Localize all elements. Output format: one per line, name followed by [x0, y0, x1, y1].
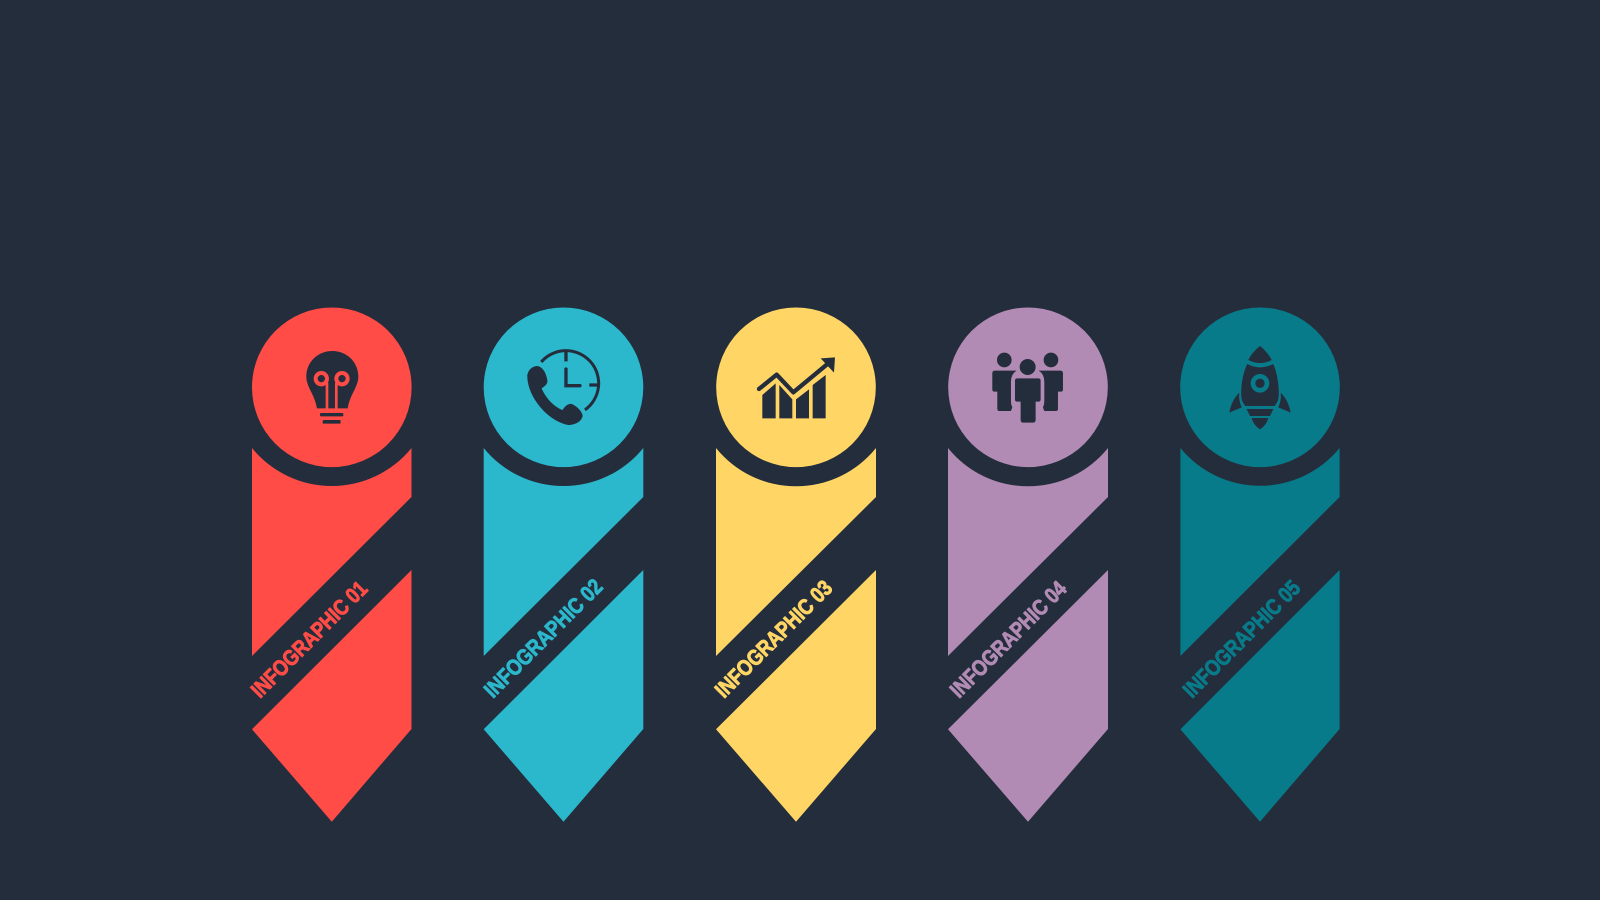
upper ribbon 01 [252, 448, 412, 656]
label 02: INFOGRAPHIC 02 [479, 574, 608, 703]
lower ribbon 04 [948, 570, 1108, 822]
icon: rising bar chart [759, 357, 835, 418]
panel: infographic 04 [945, 308, 1108, 822]
circle badge 02 [484, 308, 643, 467]
lower ribbon 05 [1180, 570, 1340, 822]
lower ribbon 02 [484, 570, 643, 822]
panel: infographic 03 [710, 308, 876, 822]
label 05: INFOGRAPHIC 05 [1178, 575, 1305, 703]
lower ribbon 03 [716, 570, 876, 822]
icon: phone and clock [527, 351, 599, 425]
upper ribbon 04 [948, 448, 1108, 656]
label 01: INFOGRAPHIC 01 [246, 576, 372, 703]
circle badge 01 [252, 308, 412, 467]
circle badge 03 [716, 308, 876, 467]
panel: infographic 05 [1178, 308, 1340, 822]
label 03: INFOGRAPHIC 03 [710, 575, 837, 703]
panel: infographic 01 [246, 308, 412, 822]
circle badge 04 [948, 308, 1108, 467]
label 04: INFOGRAPHIC 04 [945, 576, 1072, 703]
lower ribbon 01 [252, 570, 412, 822]
icon: group of people [992, 353, 1063, 423]
upper ribbon 05 [1180, 448, 1340, 656]
icon: rocket [1229, 346, 1291, 429]
circle badge 05 [1180, 308, 1340, 467]
upper ribbon 02 [484, 448, 643, 656]
icon: light bulb [306, 351, 358, 424]
panel: infographic 02 [479, 308, 643, 822]
upper ribbon 03 [716, 448, 876, 656]
